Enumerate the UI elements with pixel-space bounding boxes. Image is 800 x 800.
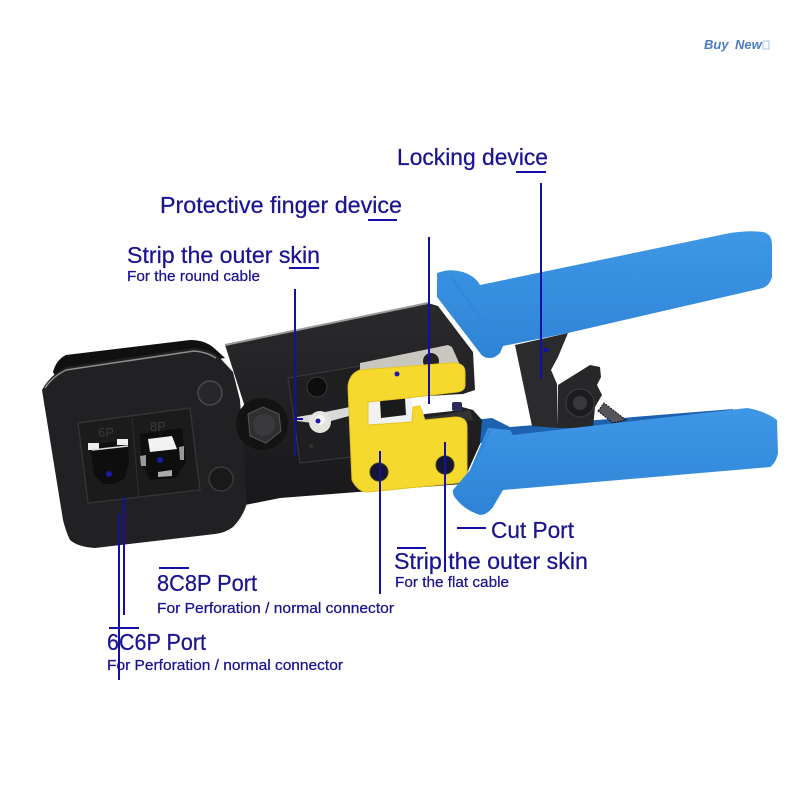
callout: 6C6P port: For Perforation / normal connector	[107, 657, 343, 674]
callout: protective finger device: Protective finger device	[160, 192, 402, 218]
callout: 8C8P port: For Perforation / normal connector	[157, 600, 394, 617]
8P port: 8P	[150, 419, 166, 434]
callout: strip flat cable: For the flat cable	[395, 574, 509, 591]
6P port: 6P	[98, 425, 114, 440]
port panel	[78, 408, 200, 503]
lower handle inner slot	[470, 409, 735, 445]
locking arm	[515, 333, 568, 428]
blade plate	[288, 345, 473, 463]
yellow guard	[348, 363, 467, 492]
label: Buy New	[704, 37, 769, 52]
callout: strip round cable: Strip the outer skin	[127, 242, 320, 268]
callout: 6C6P port: 6C6P Port	[107, 629, 207, 655]
callout: strip flat cable	[394, 442, 588, 591]
callout: strip flat cable: Strip the outer skin	[394, 548, 588, 574]
lower blue handle	[453, 408, 778, 515]
spring	[598, 403, 626, 423]
label: Buy New: New	[735, 37, 763, 52]
callout: protective finger device	[160, 192, 429, 404]
pivot bolt	[236, 398, 288, 450]
upper blue handle	[437, 231, 772, 358]
guard screws	[370, 372, 454, 481]
rivets	[198, 381, 233, 491]
leader line: lower screw	[379, 451, 381, 594]
callout: cut port: Cut Port	[491, 517, 575, 543]
callout: strip round cable	[127, 242, 320, 456]
callout: strip round cable: For the round cable	[127, 268, 260, 285]
callout: 6C6P port	[107, 513, 343, 680]
callout: locking device: Locking device	[397, 144, 548, 170]
callout: locking device	[397, 144, 548, 379]
crimping tool	[42, 231, 778, 548]
locking latch	[558, 365, 626, 428]
label: Buy New: Buy	[704, 37, 729, 52]
callout: 8C8P port: 8C8P Port	[157, 570, 258, 596]
crimping head	[42, 348, 247, 548]
callout: 8C8P port	[124, 497, 394, 617]
back plate of head	[53, 340, 225, 385]
metal body	[225, 303, 482, 505]
